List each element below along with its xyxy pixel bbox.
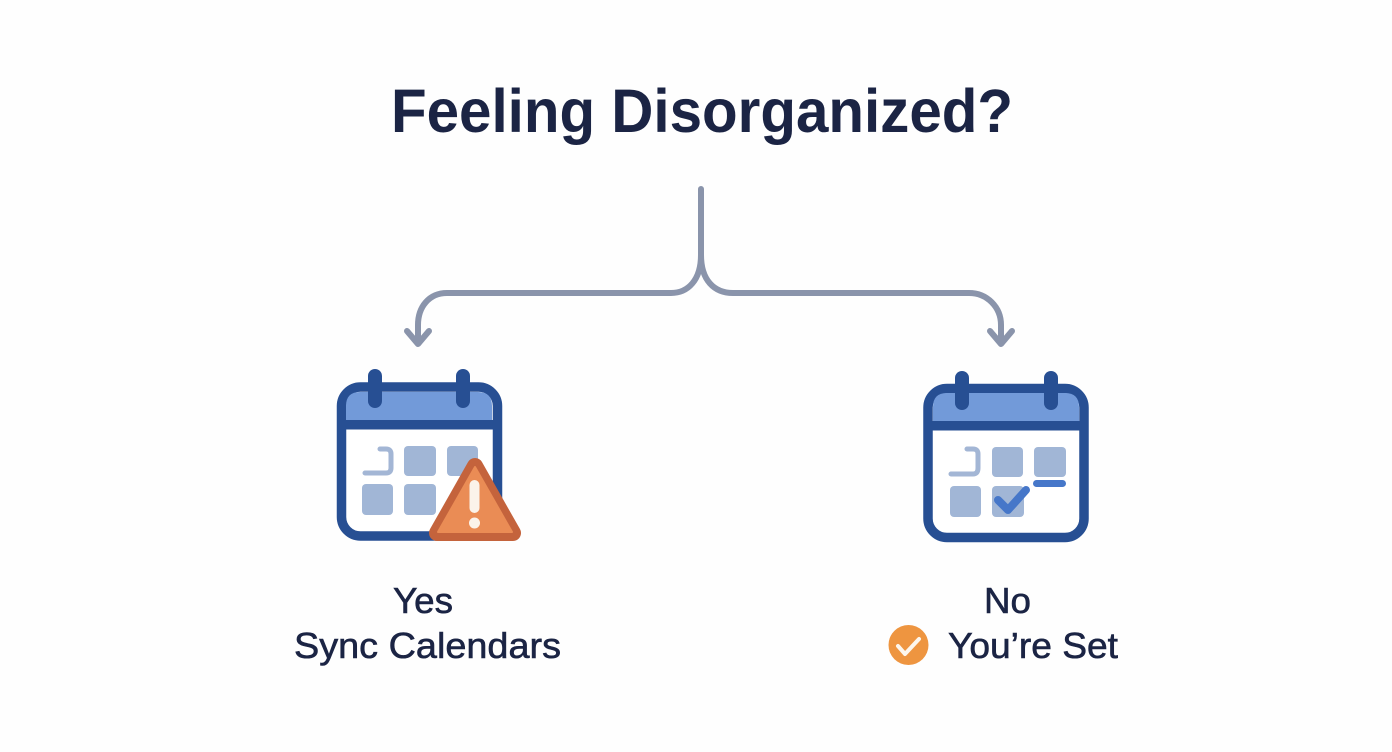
label: yes: Yes (393, 580, 453, 621)
label: you're set: You’re Set (948, 625, 1118, 666)
branching arrow (407, 189, 1012, 344)
icon: calendar with warning (341, 369, 513, 536)
icon: calendar with checkmark (928, 371, 1084, 538)
label: no: No (984, 580, 1031, 621)
icon: warning triangle (437, 466, 513, 533)
title: Feeling Disorganized? (391, 77, 1013, 145)
label: sync calendars: Sync Calendars (294, 625, 561, 666)
icon: orange check badge (888, 625, 928, 665)
icon: blue checkmark (998, 490, 1026, 510)
